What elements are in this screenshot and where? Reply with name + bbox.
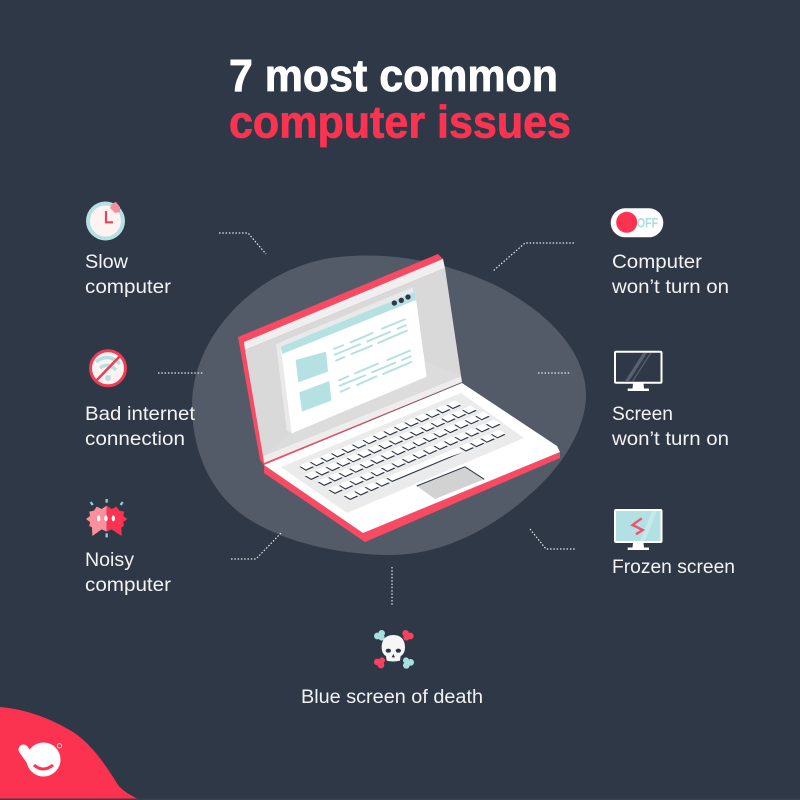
icon: dark monitor xyxy=(615,352,662,391)
background blob xyxy=(192,256,586,555)
issue: noisy computer: Noisy xyxy=(85,550,135,571)
issue: screen won't turn on: won’t turn on xyxy=(611,429,729,450)
issue: computer won't turn on xyxy=(611,208,729,298)
laptop illustration xyxy=(238,254,560,542)
icon: skull and crossbones xyxy=(374,630,414,669)
brand logo xyxy=(24,742,62,776)
issue: bad internet connection xyxy=(85,351,196,450)
laptop base xyxy=(264,383,560,542)
laptop lid xyxy=(238,254,462,465)
issue: computer won't turn on: Computer xyxy=(612,252,703,273)
issue: screen won't turn on: Screen xyxy=(612,404,673,425)
issue: frozen screen xyxy=(612,510,735,578)
icon: shouting speech bubbles xyxy=(86,499,127,537)
issue: screen won't turn on xyxy=(611,352,729,450)
issue: bad internet connection: Bad internet xyxy=(85,404,196,425)
issue: slow computer xyxy=(85,202,172,298)
icon: clock xyxy=(86,202,125,240)
connector lines xyxy=(158,233,575,606)
trackpad xyxy=(417,467,484,499)
issue: noisy computer xyxy=(85,499,172,596)
issue: computer won't turn on: won’t turn on xyxy=(611,277,729,298)
icon: off toggle: OFF xyxy=(637,214,658,230)
icon: crossed wifi xyxy=(90,351,126,386)
issue: noisy computer: computer xyxy=(85,575,172,596)
issue: blue screen of death: Blue screen of death xyxy=(301,687,483,708)
corner brand shape xyxy=(0,707,138,799)
title xyxy=(229,50,571,148)
title: 7 most common xyxy=(229,50,558,101)
icon: frozen monitor xyxy=(615,510,662,550)
title: computer issues xyxy=(229,96,571,148)
browser window on screen xyxy=(276,287,427,433)
issue: slow computer: Slow xyxy=(85,252,128,273)
issue: slow computer: computer xyxy=(85,277,172,298)
issue: blue screen of death xyxy=(301,630,483,708)
keyboard xyxy=(300,400,505,500)
issue: bad internet connection: connection xyxy=(85,429,185,450)
issue: frozen screen: Frozen screen xyxy=(612,557,735,578)
